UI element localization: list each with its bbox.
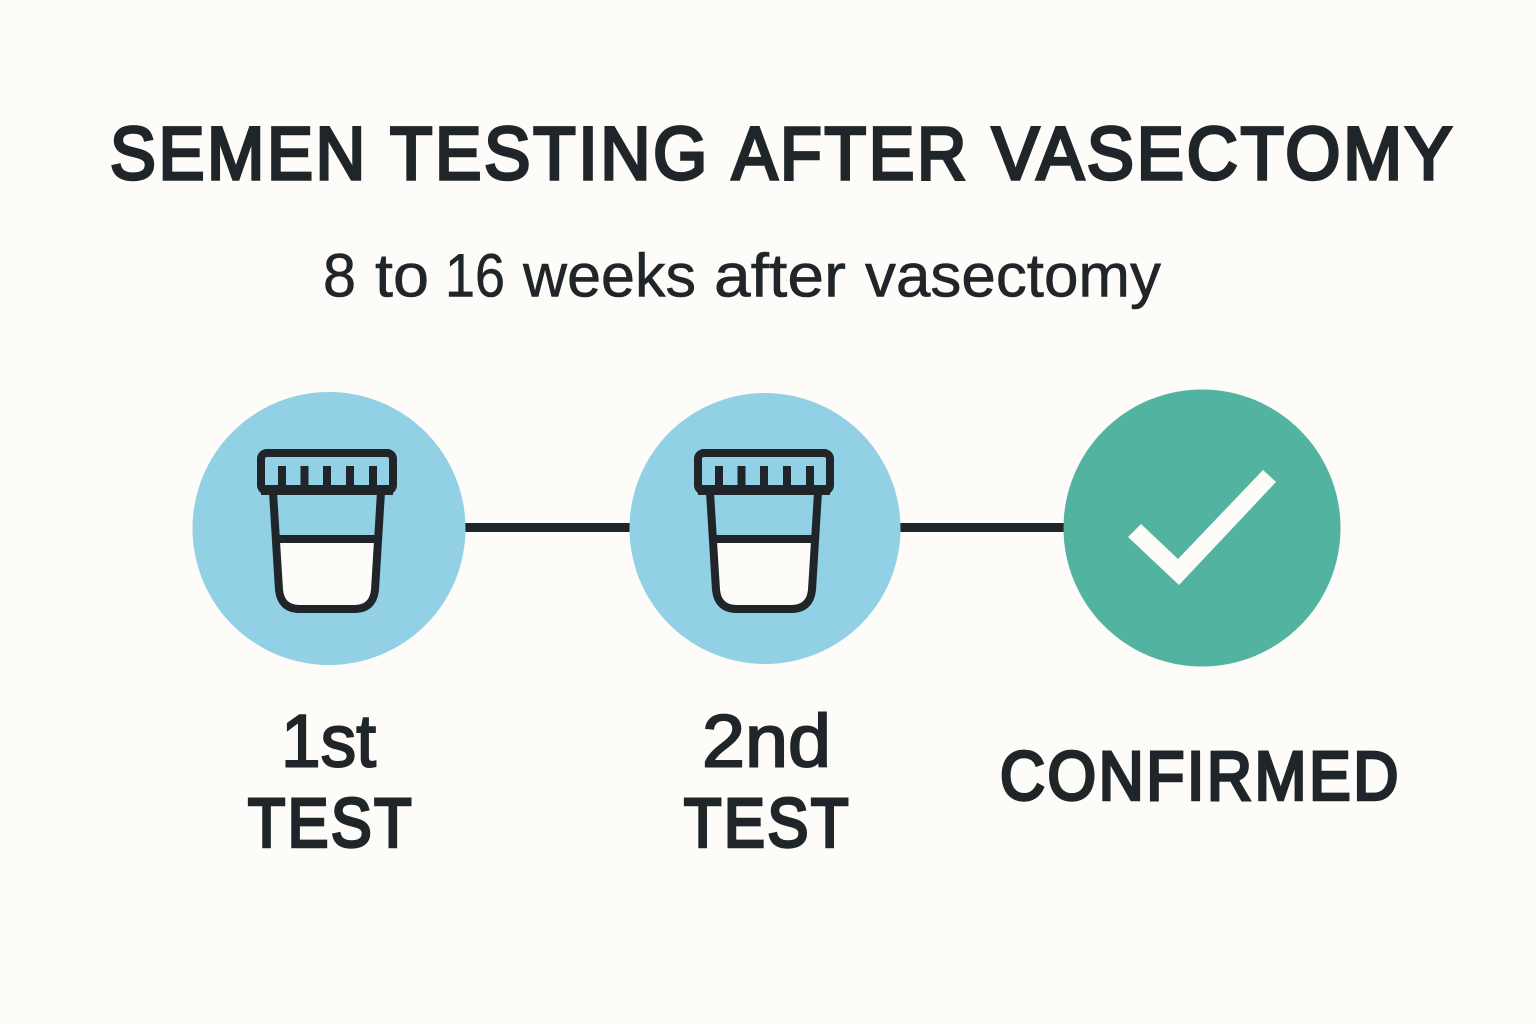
title: TESTING <box>390 112 710 195</box>
label: 1st test: 1st <box>281 700 376 782</box>
connector: 2nd test to confirmed <box>896 523 1069 532</box>
connector: 1st test to 2nd test <box>460 523 635 532</box>
icon: specimen cup 2 <box>698 453 830 609</box>
title: SEMEN <box>110 112 368 195</box>
subtitle <box>323 242 1161 310</box>
step 1 circle with cup icon <box>192 392 466 665</box>
step 2 circle with cup icon <box>630 393 900 664</box>
subtitle: after <box>714 242 846 310</box>
label: 2nd test: 2nd <box>702 700 831 782</box>
subtitle: weeks <box>522 242 696 310</box>
title <box>110 112 1455 195</box>
title: AFTER <box>732 112 969 195</box>
icon: specimen cup 1 <box>261 453 393 609</box>
label: 1st test: TEST <box>248 784 414 862</box>
title: VASECTOMY <box>992 112 1455 195</box>
label: confirmed: CONFIRMED <box>1000 738 1401 814</box>
label: 2nd test <box>684 700 851 862</box>
icon: check mark <box>1128 470 1276 585</box>
label: 1st test <box>248 700 414 862</box>
subtitle: to <box>375 242 429 310</box>
step 3 circle with check mark <box>1064 390 1340 666</box>
subtitle: vasectomy <box>865 242 1161 310</box>
label: 2nd test: TEST <box>684 784 851 862</box>
subtitle: 8 <box>323 242 356 310</box>
subtitle: 16 <box>445 242 505 310</box>
